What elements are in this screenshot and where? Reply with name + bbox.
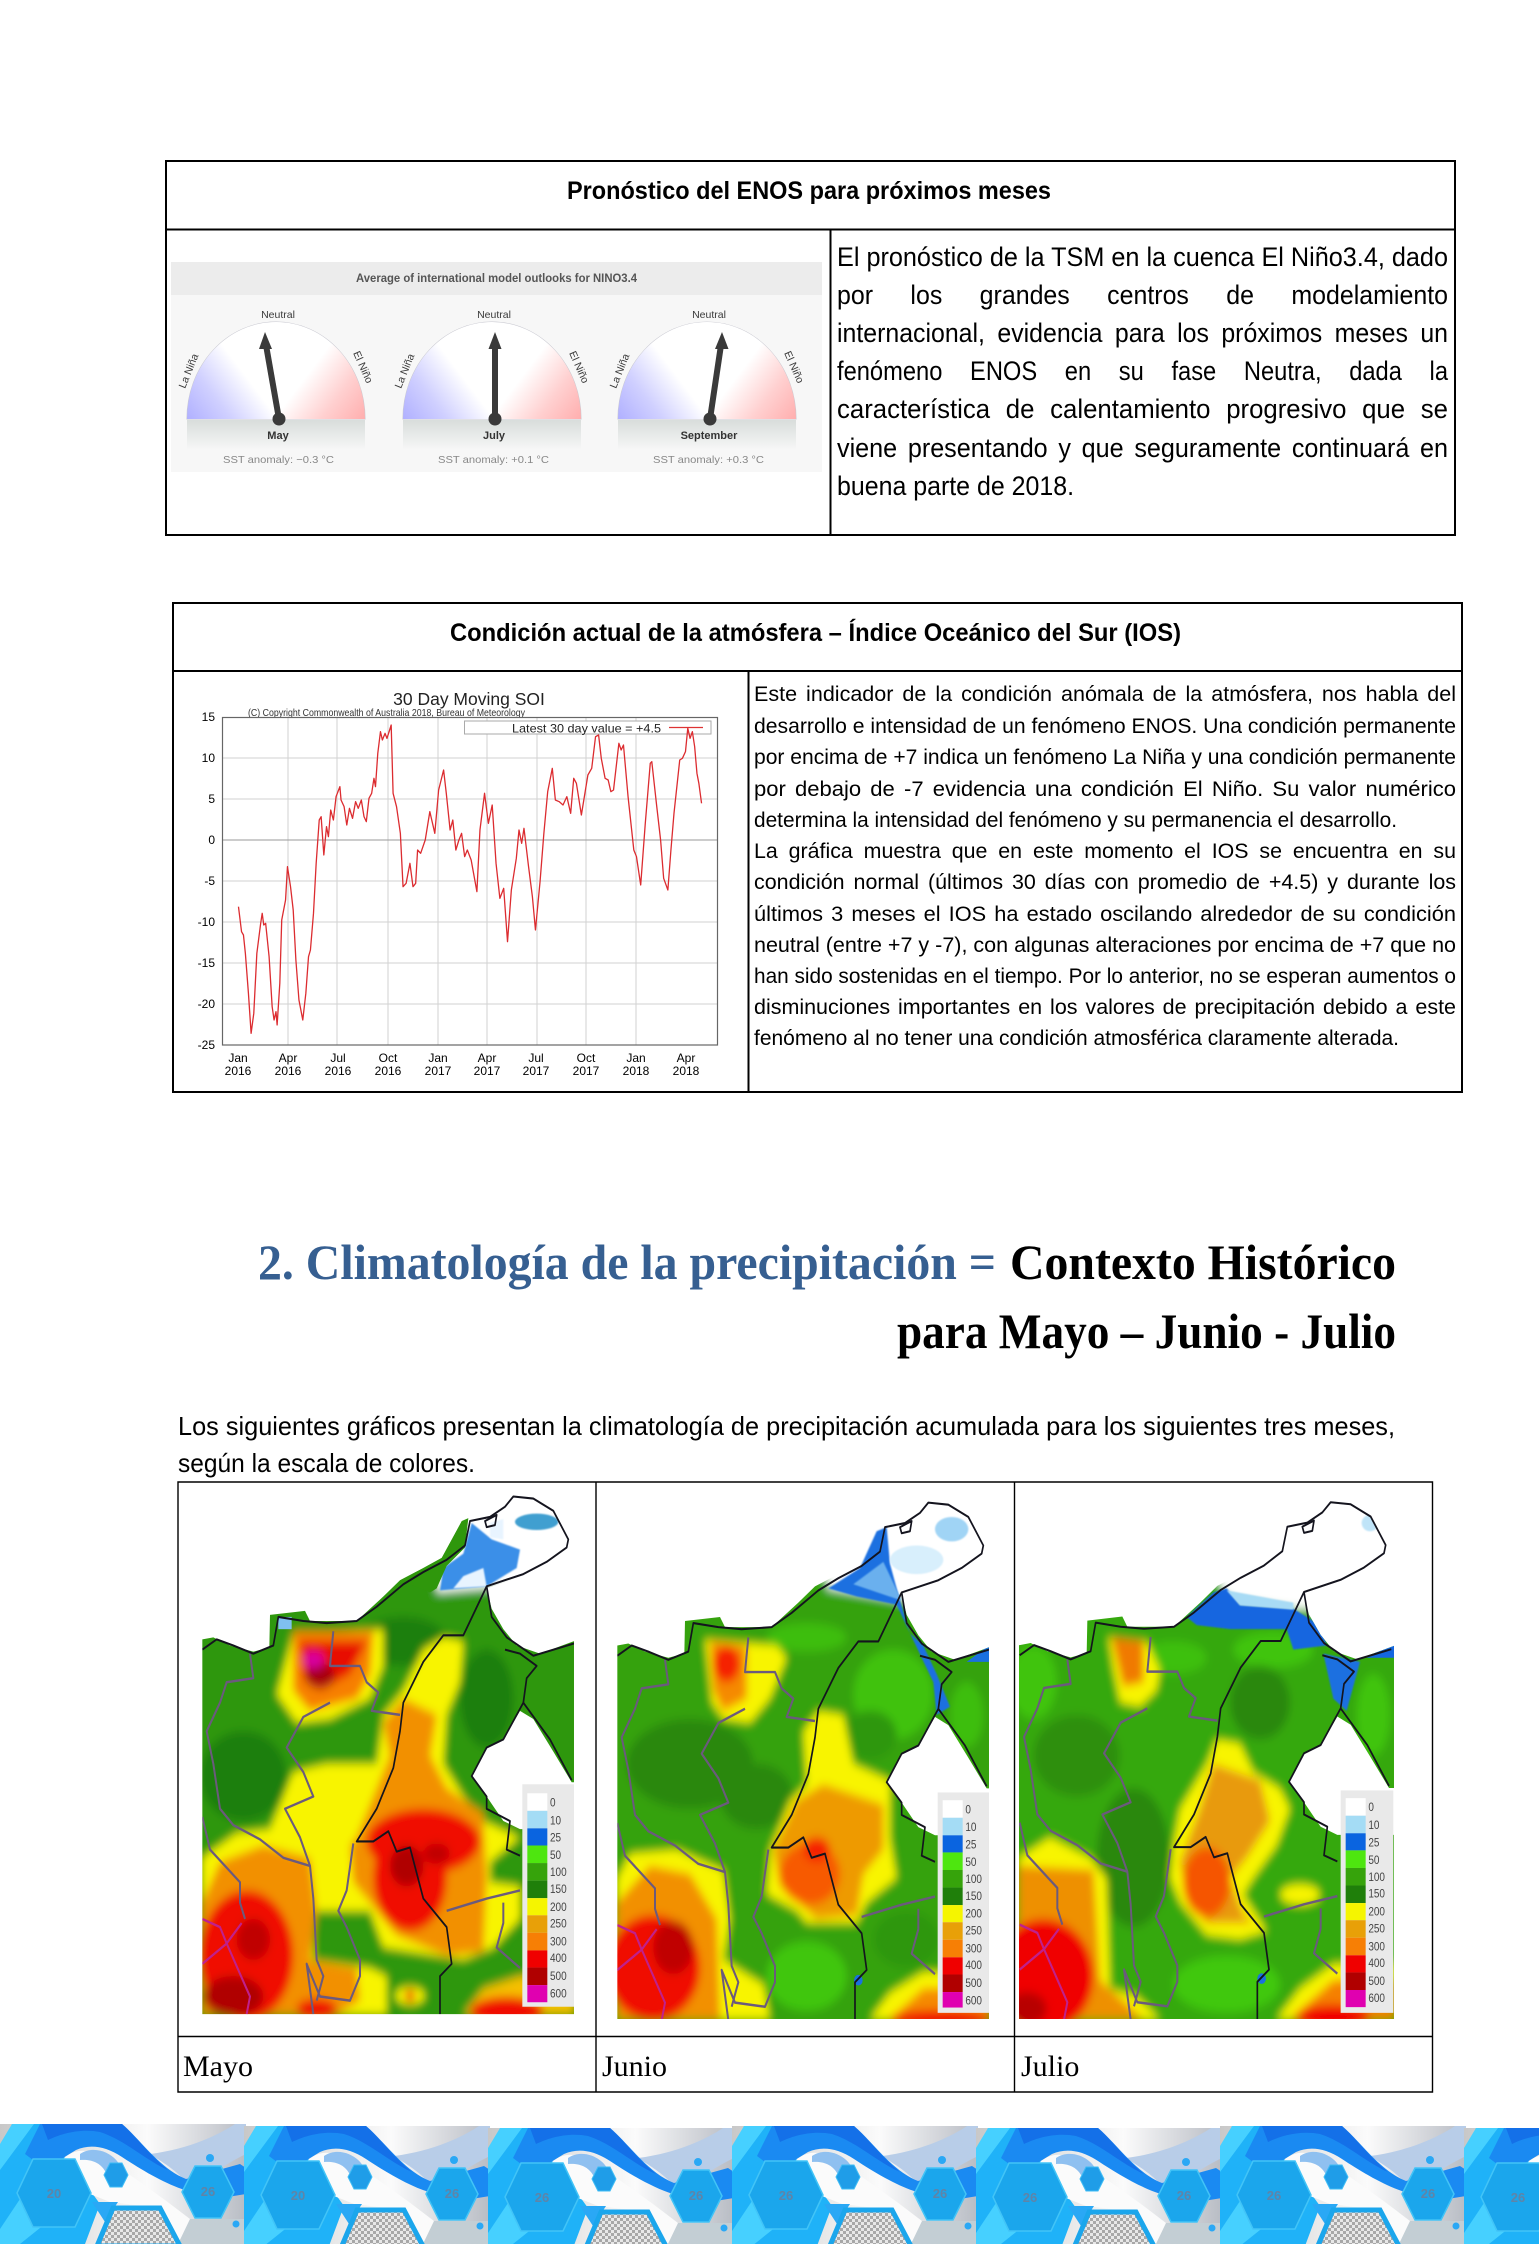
chart copyright note: (C) Copyright Commonwealth of Australia 2018, Bureau of Meteorology bbox=[248, 707, 526, 719]
colour scale legend: Julio: 50 bbox=[1368, 1854, 1379, 1867]
colour scale legend: Junio: 250 bbox=[965, 1925, 982, 1938]
gauge: September: SST anomaly: +0.3 °C bbox=[653, 454, 764, 466]
y axis labels: 15 bbox=[202, 710, 215, 724]
table heading: Pronóstico del ENOS para próximos meses bbox=[567, 177, 1051, 205]
x axis labels: Jul bbox=[330, 1051, 346, 1065]
colour scale legend: Julio: 100 bbox=[1368, 1871, 1385, 1884]
SOI text block: últimos 3 meses el IOS ha estado oscilando alrededor de su condición bbox=[754, 902, 1456, 926]
colour scale legend: Mayo: 400 bbox=[550, 1952, 567, 1966]
colour scale legend: Junio: 0 bbox=[965, 1803, 971, 1817]
section heading: climatology: para Mayo – Junio - Julio bbox=[897, 1303, 1396, 1359]
x axis labels: 2018 bbox=[623, 1064, 650, 1078]
x axis labels: Apr bbox=[279, 1051, 297, 1065]
colour scale legend: Junio: 10 bbox=[965, 1821, 976, 1835]
gauge: September: El Niño bbox=[781, 349, 806, 385]
colour scale legend: Mayo: 600 bbox=[550, 1987, 567, 2001]
section heading: climatology: Contexto Histórico bbox=[1010, 1234, 1396, 1290]
gauge: September: La Niña bbox=[608, 352, 632, 390]
line chart: 30 Day Moving SOI bbox=[198, 689, 718, 1078]
x axis labels: Oct bbox=[577, 1051, 596, 1065]
forecast text block: fenómeno ENOS en su fase Neutra, dada la bbox=[837, 356, 1449, 386]
footer: hexagon banner: 20 bbox=[47, 2186, 61, 2201]
gauge: July: La Niña bbox=[393, 352, 417, 390]
SOI data line bbox=[238, 725, 702, 1033]
SOI text block: Este indicador de la condición anómala de la atmósfera, nos habla del bbox=[754, 682, 1456, 706]
month label: Mayo: Mayo bbox=[183, 2050, 253, 2083]
x axis labels: 2017 bbox=[523, 1064, 550, 1078]
table heading: Condición actual de la atmósfera – Índice Oceánico del Sur (IOS) bbox=[450, 618, 1181, 647]
footer: hexagon banner: 26 bbox=[201, 2184, 215, 2199]
footer: hexagon banner: 20 bbox=[291, 2188, 305, 2203]
month label: Julio: Julio bbox=[1021, 2050, 1079, 2083]
y axis labels bbox=[198, 710, 215, 1052]
footer: hexagon banner: 26 bbox=[535, 2190, 549, 2205]
y axis labels: 5 bbox=[208, 792, 215, 806]
footer: hexagon banner bbox=[0, 2124, 1539, 2244]
gauge: May: May bbox=[267, 430, 290, 442]
gauge: July: SST anomaly: +0.1 °C bbox=[438, 454, 549, 466]
colour scale legend: Mayo: 200 bbox=[550, 1901, 567, 1914]
footer: hexagon banner: 26 bbox=[779, 2188, 793, 2203]
x axis labels bbox=[225, 1051, 700, 1078]
x axis labels: Jan bbox=[228, 1051, 248, 1065]
gauge image title: Average of international model outlooks for NINO3.4 bbox=[356, 273, 638, 285]
SOI text block: condición normal (últimos 30 días con promedio de +4.5) y durante los bbox=[754, 870, 1456, 894]
gauge: July bbox=[393, 309, 591, 466]
colour scale legend: Junio: 300 bbox=[965, 1943, 982, 1956]
intro paragraph: según la escala de colores. bbox=[178, 1448, 475, 1478]
panel: precipitation climatology maps table bbox=[202, 1496, 574, 2014]
maps table grid bbox=[178, 1482, 1432, 2092]
chart title: 30 Day Moving SOI bbox=[393, 689, 545, 709]
x axis labels: Apr bbox=[478, 1051, 496, 1065]
colour scale legend: Mayo: 250 bbox=[550, 1918, 567, 1931]
x axis labels: 2016 bbox=[325, 1064, 352, 1078]
colour scale legend: Mayo: 300 bbox=[550, 1936, 567, 1949]
SOI text block bbox=[754, 682, 1456, 1050]
footer: hexagon banner: 26 bbox=[1511, 2190, 1525, 2205]
y axis labels: -10 bbox=[198, 915, 215, 929]
colour scale legend: Mayo: 0 bbox=[550, 1796, 556, 1810]
colour scale legend: Junio: 25 bbox=[965, 1839, 976, 1852]
colour scale legend: Julio: 10 bbox=[1368, 1819, 1379, 1832]
SOI text block: por encima de +7 indica un fenómeno La Niña y una condición permanente bbox=[754, 745, 1456, 769]
colour scale legend: Mayo: 10 bbox=[550, 1814, 561, 1828]
map: Julio bbox=[1019, 1501, 1394, 2019]
gauge: July: July bbox=[483, 430, 506, 442]
map: Mayo bbox=[202, 1496, 574, 2014]
chart legend: Latest 30 day value = +4.5 bbox=[512, 722, 661, 736]
SOI text block: disminuciones importantes en los valores de precipitación debido a este bbox=[754, 995, 1456, 1019]
gauge: May: SST anomaly: −0.3 °C bbox=[223, 454, 334, 466]
x axis labels: Jan bbox=[428, 1051, 448, 1065]
gauge: May: El Niño bbox=[350, 349, 375, 385]
gauge: September: Neutral bbox=[692, 309, 726, 321]
y axis labels: -25 bbox=[198, 1038, 215, 1052]
forecast text block: internacional, evidencia para los próximos meses un bbox=[837, 318, 1448, 348]
x axis labels: Jul bbox=[528, 1051, 544, 1065]
footer: hexagon banner: 26 bbox=[1267, 2188, 1281, 2203]
colour scale legend: Junio: 400 bbox=[965, 1959, 982, 1972]
month label: Junio: Junio bbox=[602, 2050, 667, 2083]
colour scale legend: Julio bbox=[1341, 1790, 1393, 2013]
colour scale legend: Julio: 500 bbox=[1368, 1975, 1385, 1988]
gauge image: model outlooks bbox=[171, 262, 822, 472]
x axis labels: 2016 bbox=[375, 1064, 402, 1078]
colour scale legend: Junio: 600 bbox=[965, 1994, 982, 2008]
forecast text block bbox=[837, 242, 1449, 501]
footer: hexagon banner: 26 bbox=[689, 2188, 703, 2203]
colour scale legend: Mayo: 100 bbox=[550, 1866, 567, 1879]
y axis labels: -5 bbox=[204, 874, 215, 888]
colour scale legend: Julio: 25 bbox=[1368, 1836, 1379, 1850]
section heading: climatology bbox=[258, 1234, 1396, 1359]
colour scale legend: Junio: 50 bbox=[965, 1856, 976, 1869]
x axis labels: 2018 bbox=[673, 1064, 700, 1078]
forecast text block: viene presentando y que seguramente continuará en bbox=[837, 433, 1448, 463]
gauge: July: Neutral bbox=[477, 309, 511, 321]
intro paragraph: Los siguientes gráficos presentan la climatología de precipitación acumulada para los siguientes tres meses, bbox=[178, 1411, 1395, 1441]
panel: ENSO forecast table bbox=[166, 161, 1455, 535]
colour scale legend: Julio: 0 bbox=[1368, 1801, 1374, 1815]
SOI text block: determina la intensidad del fenómeno y su permanencia el desarrollo. bbox=[754, 808, 1397, 832]
colour scale legend: Mayo: 25 bbox=[550, 1832, 561, 1845]
x axis labels: 2017 bbox=[573, 1064, 600, 1078]
table frame bbox=[173, 603, 1462, 1092]
colour scale legend: Junio: 150 bbox=[965, 1890, 982, 1903]
gauge: September: September bbox=[681, 430, 738, 442]
colour scale legend: Julio: 300 bbox=[1368, 1941, 1385, 1954]
colour scale legend: Julio: 600 bbox=[1368, 1992, 1385, 2006]
x axis labels: 2017 bbox=[474, 1064, 501, 1078]
gauge: July: El Niño bbox=[566, 349, 591, 385]
footer: hexagon banner: 26 bbox=[933, 2186, 947, 2201]
footer: hexagon banner: 26 bbox=[1177, 2188, 1191, 2203]
y axis labels: -15 bbox=[198, 956, 215, 970]
table frame bbox=[166, 161, 1455, 535]
chart legend bbox=[464, 721, 711, 736]
x axis labels: Oct bbox=[379, 1051, 398, 1065]
colour scale legend: Junio: 500 bbox=[965, 1977, 982, 1990]
colour scale legend: Junio: 200 bbox=[965, 1908, 982, 1921]
y axis labels: -20 bbox=[198, 997, 215, 1011]
panel: Southern Oscillation Index table bbox=[173, 603, 1462, 1092]
footer: hexagon banner: 26 bbox=[1023, 2190, 1037, 2205]
gauge: May: Neutral bbox=[261, 309, 295, 321]
gauge: September bbox=[608, 309, 806, 466]
map: Junio bbox=[617, 1502, 989, 2019]
colour scale legend: Mayo bbox=[522, 1784, 574, 2007]
x axis labels: 2016 bbox=[275, 1064, 302, 1078]
colour scale legend: Julio: 200 bbox=[1368, 1906, 1385, 1919]
y axis labels: 10 bbox=[202, 751, 215, 765]
forecast text block: característica de calentamiento progresivo que se bbox=[837, 394, 1448, 424]
x axis labels: 2017 bbox=[425, 1064, 452, 1078]
gauge: May bbox=[177, 309, 375, 466]
colour scale legend: Mayo: 500 bbox=[550, 1970, 567, 1983]
colour scale legend: Julio: 400 bbox=[1368, 1957, 1385, 1970]
colour scale legend: Mayo: 50 bbox=[550, 1849, 561, 1862]
intro paragraph bbox=[178, 1411, 1395, 1478]
footer: hexagon banner: 26 bbox=[1421, 2186, 1435, 2201]
x axis labels: Apr bbox=[677, 1051, 695, 1065]
section heading: climatology: 2. Climatología de la precipitación = bbox=[258, 1234, 996, 1290]
colour scale legend: Junio: 100 bbox=[965, 1873, 982, 1886]
x axis labels: 2016 bbox=[225, 1064, 252, 1078]
colour scale legend: Julio: 150 bbox=[1368, 1888, 1385, 1901]
footer: hexagon banner: 26 bbox=[445, 2186, 459, 2201]
SOI text block: desarrollo e intensidad de un fenómeno ENOS. Una condición permanente bbox=[754, 714, 1456, 738]
colour scale legend: Junio bbox=[938, 1792, 989, 2013]
colour scale legend: Mayo: 150 bbox=[550, 1883, 567, 1896]
SOI text block: por debajo de -7 evidencia una condición El Niño. Su valor numérico bbox=[754, 777, 1456, 801]
SOI text block: fenómeno al no tener una condición atmosférica claramente alterada. bbox=[754, 1026, 1399, 1050]
y axis labels: 0 bbox=[208, 833, 215, 847]
forecast text block: buena parte de 2018. bbox=[837, 471, 1074, 501]
gauge: May: La Niña bbox=[177, 352, 201, 390]
colour scale legend: Julio: 250 bbox=[1368, 1923, 1385, 1936]
SOI text block: neutral (entre +7 y -7), con algunas alteraciones por encima de +7 que no bbox=[754, 933, 1456, 957]
SOI text block: han sido sostenidas en el tiempo. Por lo anterior, no se esperan aumentos o bbox=[754, 964, 1456, 988]
x axis labels: Jan bbox=[626, 1051, 646, 1065]
SOI text block: La gráfica muestra que en este momento el IOS se encuentra en su bbox=[754, 839, 1456, 863]
forecast text block: El pronóstico de la TSM en la cuenca El Niño3.4, dado bbox=[837, 242, 1448, 272]
forecast text block: por los grandes centros de modelamiento bbox=[837, 280, 1448, 310]
